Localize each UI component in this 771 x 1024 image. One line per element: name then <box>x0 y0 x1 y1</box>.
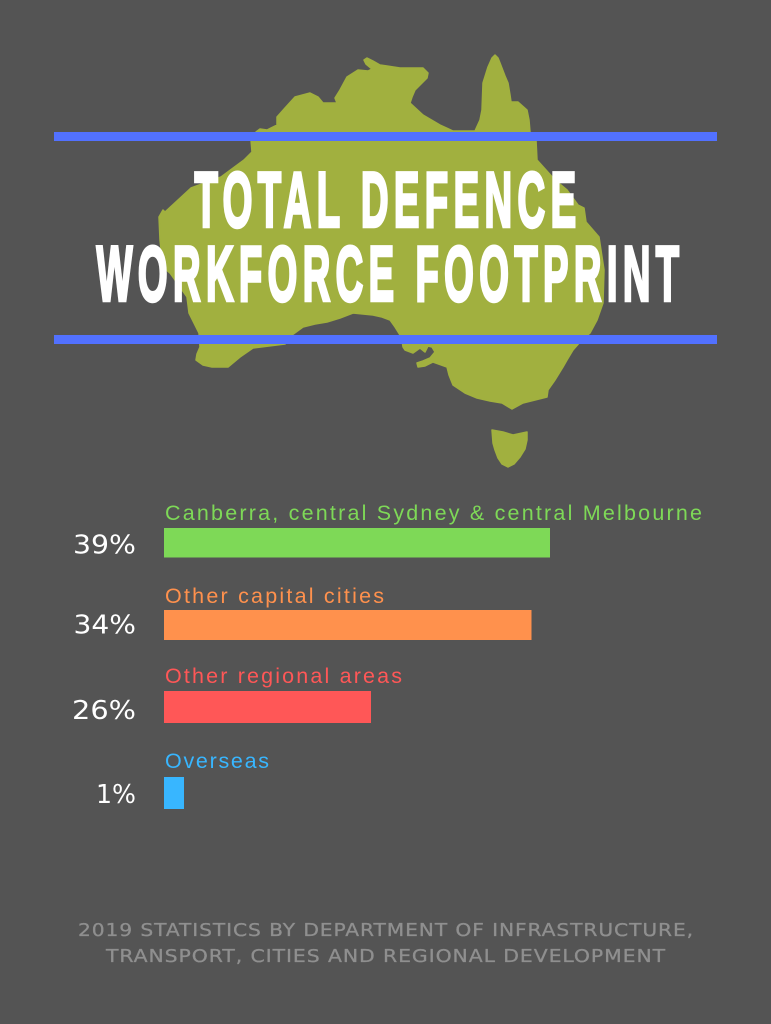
source note: TRANSPORT, CITIES AND REGIONAL DEVELOPMENT <box>105 946 666 967</box>
top blue rule <box>54 132 717 141</box>
bar row: Other regional areas: Other regional areas <box>165 664 402 688</box>
bar row: Overseas: 1% <box>96 780 136 810</box>
title <box>96 155 684 317</box>
bar row: Canberra, central Sydney and central Melbourne <box>73 501 702 560</box>
bar row: Other regional areas <box>72 664 402 726</box>
source note: 2019 STATISTICS BY DEPARTMENT OF INFRASTRUCTURE, <box>78 920 694 941</box>
bar row: Overseas <box>96 749 269 810</box>
bar row: Other capital cities: 34% <box>74 610 136 640</box>
bar row: Canberra, central Sydney and central Melbourne: Canberra, central Sydney & central Melbourne <box>165 501 702 525</box>
bar row: Canberra, central Sydney and central Melbourne: 39% <box>73 530 136 560</box>
map of Australia <box>159 55 604 467</box>
bar row: Other regional areas: 26% <box>72 696 136 726</box>
bar row: Overseas: Overseas <box>165 749 269 773</box>
source note <box>78 920 694 967</box>
bar row: Other capital cities: Other capital cities <box>165 584 384 608</box>
bar row: Other capital cities <box>74 584 532 640</box>
bottom blue rule <box>54 335 717 344</box>
